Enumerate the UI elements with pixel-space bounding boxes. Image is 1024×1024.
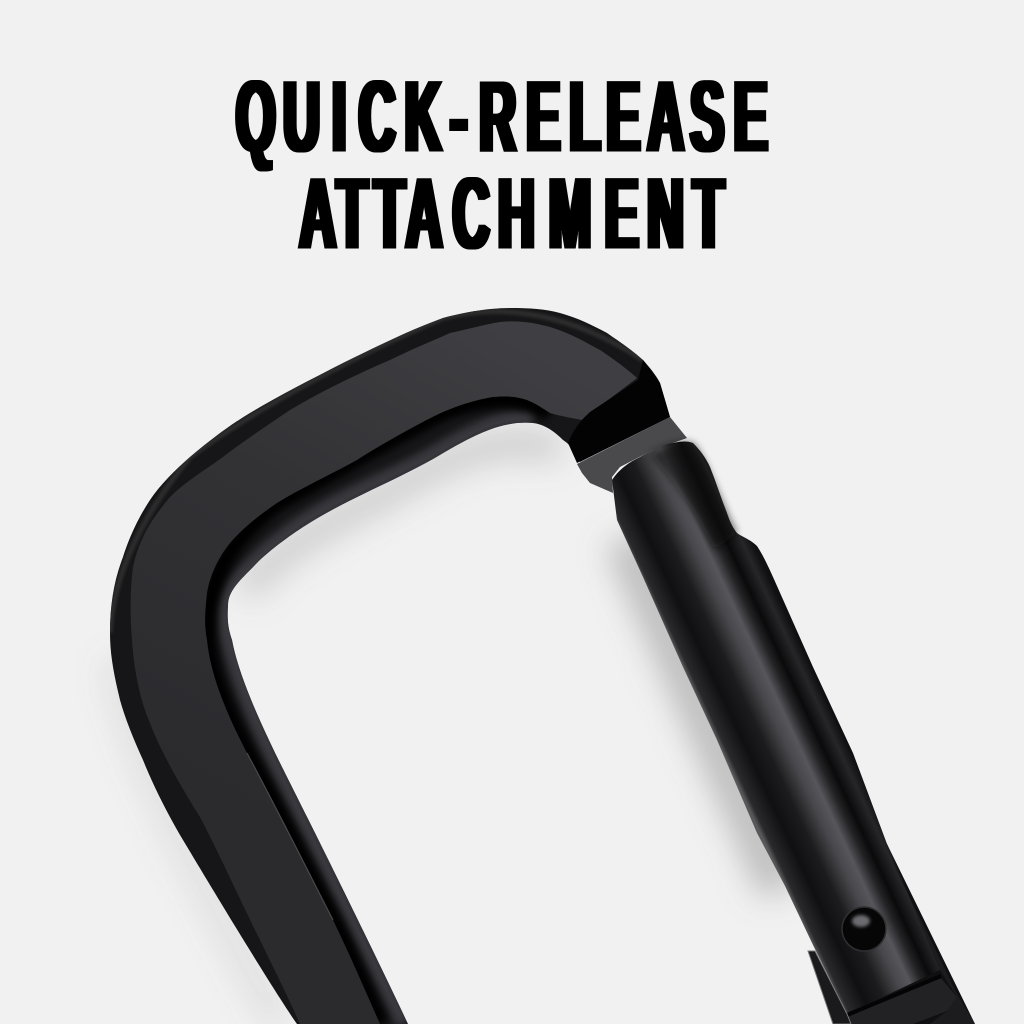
title: ATTACHMENT [299, 157, 724, 271]
title: QUICK-RELEASE [236, 61, 768, 174]
polished notch near hinge [568, 360, 670, 463]
shading on inner rim [110, 312, 643, 1024]
gate tip collar [833, 977, 957, 1024]
carabiner photo illustration [110, 308, 975, 1024]
rivet [842, 907, 886, 951]
soft cast shadow [115, 443, 780, 1024]
hinge grey facet [577, 417, 687, 493]
title [236, 61, 768, 271]
right side rim plate [887, 844, 975, 1024]
side pin [808, 951, 851, 1024]
lit edge along face [247, 753, 333, 920]
base under collar [833, 844, 975, 1024]
matte front face of the body [131, 321, 637, 1024]
gate barrel [612, 442, 940, 1014]
infographic canvas [109, 80, 975, 1024]
gate top shading [650, 442, 737, 550]
carabiner body: left arm and curved top [110, 308, 670, 1024]
